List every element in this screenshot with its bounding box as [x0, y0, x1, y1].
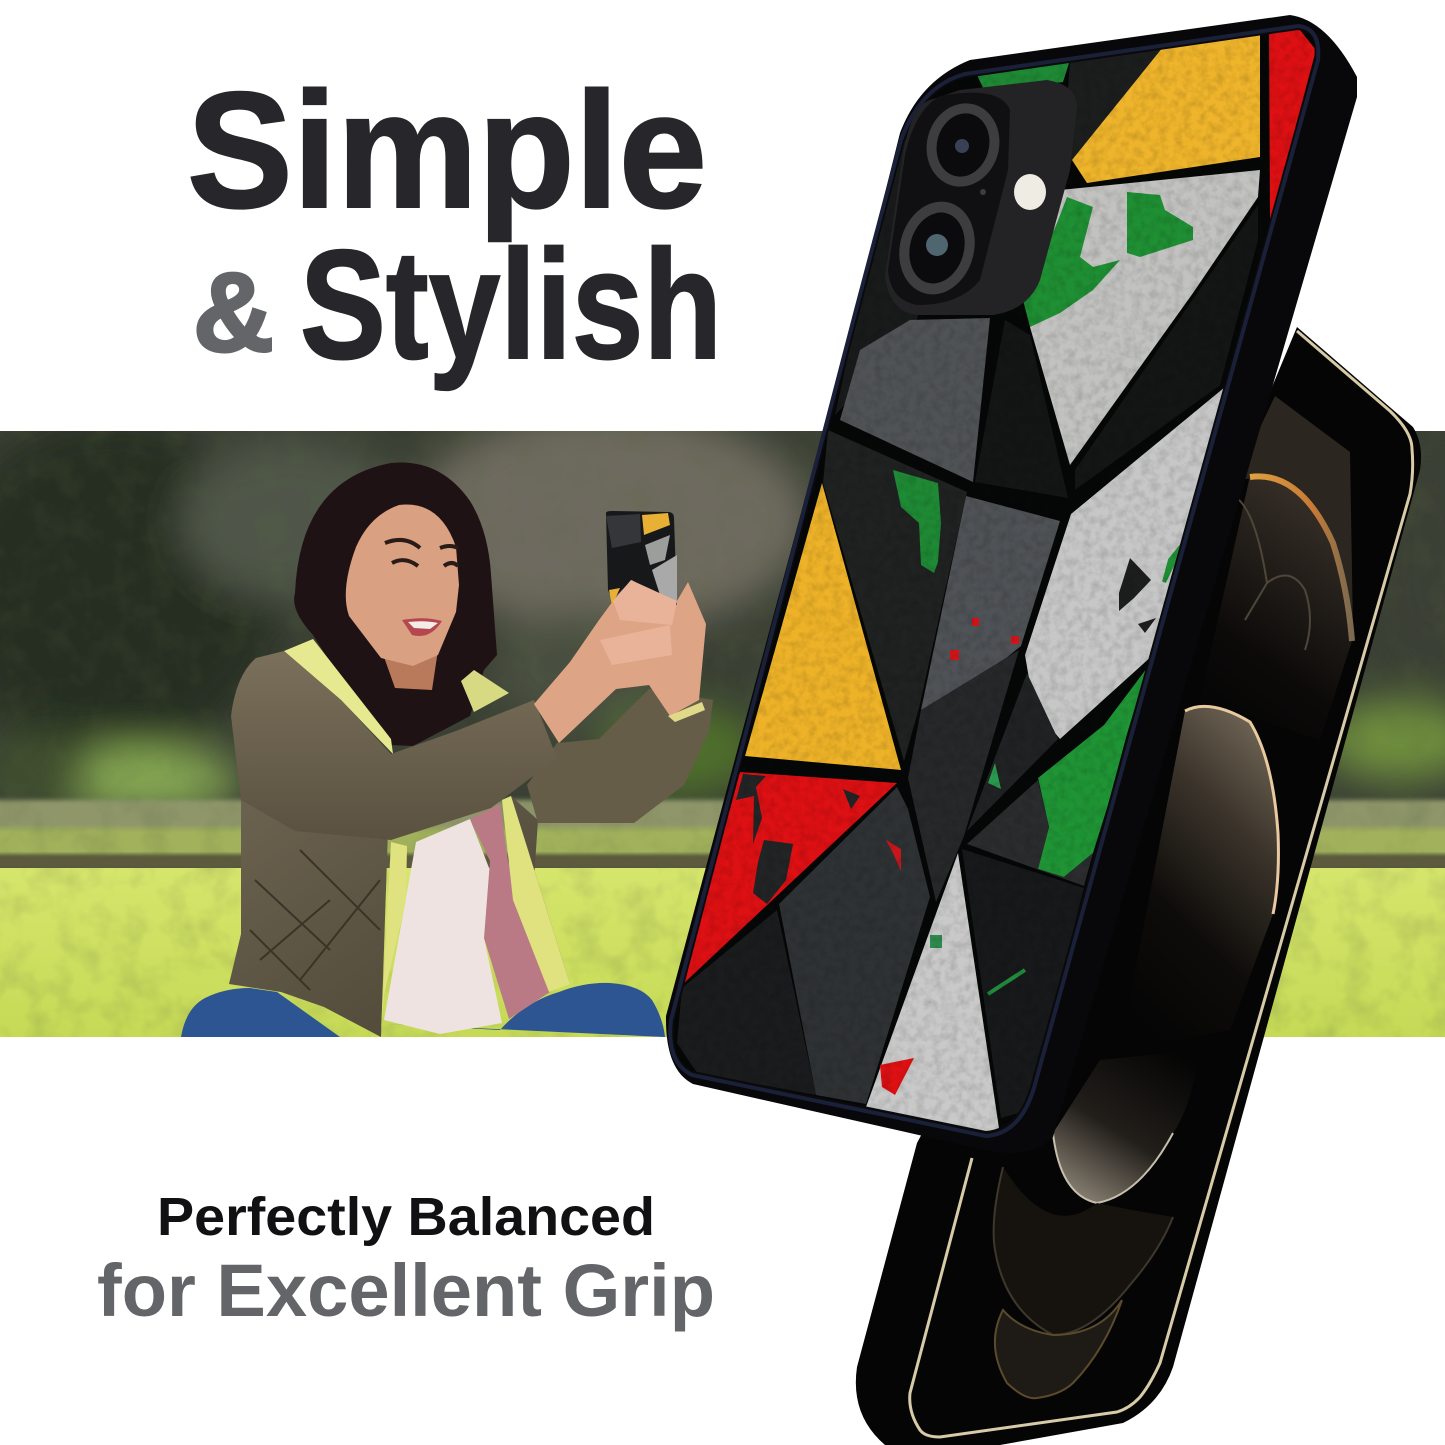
bottom arc line	[1053, 1133, 1173, 1203]
holes in white shard	[1119, 558, 1156, 633]
title: Simple & Stylish: &	[193, 250, 274, 375]
yellow mid triangle	[745, 483, 901, 770]
red splash	[886, 840, 901, 871]
upper panel	[1235, 396, 1353, 632]
rainbow arc	[1250, 476, 1352, 641]
green lower shard	[1038, 668, 1147, 877]
fingers	[600, 580, 677, 665]
brows and eyes	[385, 540, 458, 566]
wallpaper	[994, 396, 1353, 1398]
hair	[294, 462, 497, 746]
green dot	[988, 763, 1001, 789]
title: Simple & Stylish: Stylish	[300, 218, 722, 391]
left collar	[284, 639, 393, 754]
dark right shard	[1075, 205, 1258, 490]
lower globe	[1120, 706, 1278, 1050]
held phone	[606, 511, 677, 606]
faint second ellipse	[994, 1167, 1173, 1335]
tagline: Perfectly Balanced for Excellent Grip: Perfectly Balanced	[157, 1187, 655, 1247]
smile	[402, 618, 442, 636]
jacket torso	[229, 790, 570, 1037]
lower arc line	[1185, 706, 1278, 914]
grey mid shard	[921, 496, 1060, 710]
title: Simple & Stylish	[187, 58, 722, 391]
black bottom left	[677, 910, 816, 1095]
photo: woman taking a selfie in a park	[0, 410, 1445, 1037]
quilt lines	[250, 850, 380, 990]
dark left shard	[835, 140, 918, 414]
white mid shard	[1025, 387, 1225, 739]
navy rim	[670, 26, 1318, 1136]
dark grey lower-right shard	[967, 780, 1093, 886]
small green in white shard	[1164, 545, 1182, 582]
black centre shard	[975, 320, 1068, 498]
green top	[978, 63, 1069, 88]
dark upper shard	[1068, 50, 1160, 163]
dark sliver	[967, 673, 1058, 831]
third ellipse	[995, 1300, 1122, 1398]
green splash upper	[1023, 192, 1193, 327]
bracelet	[668, 702, 705, 722]
back phone: screen side	[856, 327, 1421, 1445]
dark textured shard	[823, 430, 967, 761]
white bottom triangle	[866, 853, 1000, 1135]
red triangle	[682, 772, 897, 985]
flash	[1014, 174, 1046, 210]
far sleeve	[527, 689, 713, 823]
neck	[384, 655, 438, 690]
grey lower	[779, 787, 930, 1104]
dark grey left shard	[840, 318, 990, 482]
upper globe	[1200, 476, 1352, 740]
black bottom right	[962, 849, 1084, 1118]
star glint	[1232, 495, 1310, 650]
lower lens	[889, 193, 985, 303]
upper lens	[917, 95, 1009, 195]
gold frame	[910, 331, 1413, 1437]
bottom globe	[1053, 1050, 1200, 1203]
green and red spots	[930, 935, 942, 948]
red dots	[950, 618, 1019, 660]
jacket lining	[381, 796, 570, 1030]
title: Simple & Stylish: Simple	[187, 58, 707, 242]
right collar	[461, 670, 509, 712]
plaid shirt	[470, 804, 550, 1019]
red splash white triangle	[880, 1058, 914, 1095]
green splash dark	[893, 470, 941, 573]
hands	[534, 580, 706, 743]
lens housing	[888, 93, 1010, 305]
charcoal centre	[908, 650, 1019, 902]
jeans	[181, 983, 665, 1037]
grey-white upper shard	[1030, 170, 1260, 465]
red shard holes	[736, 774, 860, 904]
case outer body	[666, 15, 1357, 1153]
face	[346, 505, 459, 666]
woman	[181, 462, 713, 1037]
printed pattern	[660, 20, 1330, 1150]
near sleeve	[231, 651, 557, 840]
green stroke	[988, 970, 1025, 994]
camera module	[885, 80, 1077, 315]
front phone case	[660, 15, 1357, 1153]
yellow top shard	[1072, 32, 1260, 183]
microphone	[980, 189, 986, 195]
red top shard	[1269, 28, 1316, 223]
white shirt	[384, 819, 502, 1034]
tagline: Perfectly Balanced for Excellent Grip: for Excellent Grip	[97, 1249, 715, 1332]
tagline: Perfectly Balanced for Excellent Grip	[97, 1187, 715, 1332]
